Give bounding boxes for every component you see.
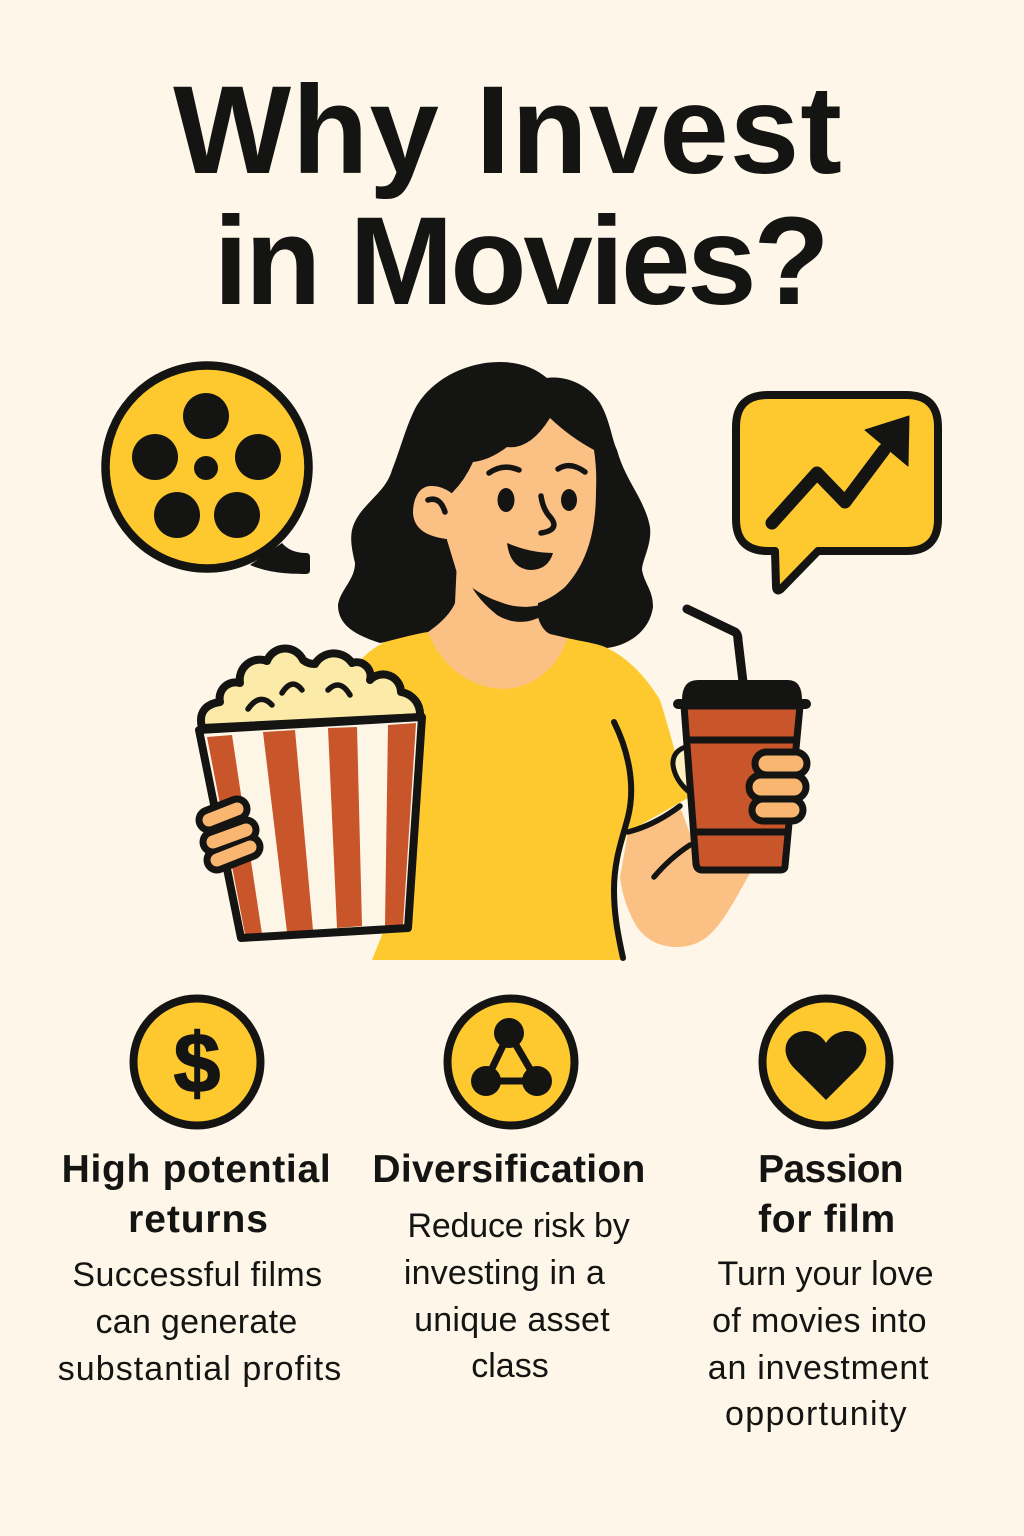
text: passion description: of movies into — [712, 1302, 927, 1340]
text: returns description: can generate — [95, 1303, 298, 1341]
text: passion description: an investment — [708, 1349, 929, 1387]
text: diversification description: class — [471, 1347, 549, 1385]
icon: film reel — [106, 366, 310, 574]
heading: high potential returns: High potential — [62, 1148, 331, 1191]
body and sleeve lines — [614, 722, 631, 958]
shirt — [350, 632, 688, 960]
heading: passion for film: Passion — [758, 1148, 903, 1191]
text: diversification description: Reduce risk by — [407, 1207, 630, 1245]
icon: drink cup — [673, 609, 807, 870]
icon: network triangle — [448, 998, 574, 1126]
neck — [428, 560, 567, 689]
heading: passion for film: for film — [758, 1198, 896, 1241]
text: passion description: opportunity — [725, 1395, 908, 1433]
arm — [620, 807, 750, 947]
facial features — [428, 466, 585, 570]
face — [446, 418, 596, 606]
text: diversification description: investing in a — [404, 1254, 605, 1292]
icon: growth chart speech bubble — [736, 395, 938, 590]
text: passion description — [708, 1255, 934, 1433]
heading: high potential returns — [62, 1148, 331, 1241]
icon: heart — [762, 998, 890, 1126]
heading: diversification: Diversification — [372, 1148, 646, 1191]
text: returns description: Successful films — [72, 1256, 323, 1294]
text: returns description: substantial profits — [58, 1350, 342, 1388]
title — [173, 61, 843, 331]
icon: dollar: $ — [174, 1016, 220, 1110]
ear — [413, 486, 460, 540]
hand — [209, 809, 250, 860]
text: diversification description — [404, 1207, 630, 1385]
icon: popcorn bucket — [199, 648, 422, 938]
title: Why Invest — [173, 61, 843, 200]
text: passion description: Turn your love — [717, 1255, 934, 1293]
text: returns description — [58, 1256, 342, 1388]
hair — [338, 362, 653, 648]
title: in Movies? — [214, 192, 826, 331]
text: diversification description: unique asset — [414, 1301, 610, 1339]
person: woman — [338, 362, 750, 960]
heading: passion for film — [758, 1148, 903, 1241]
icon: dollar — [134, 998, 260, 1126]
jaw shadow — [469, 581, 570, 622]
heading: high potential returns: returns — [128, 1198, 269, 1241]
